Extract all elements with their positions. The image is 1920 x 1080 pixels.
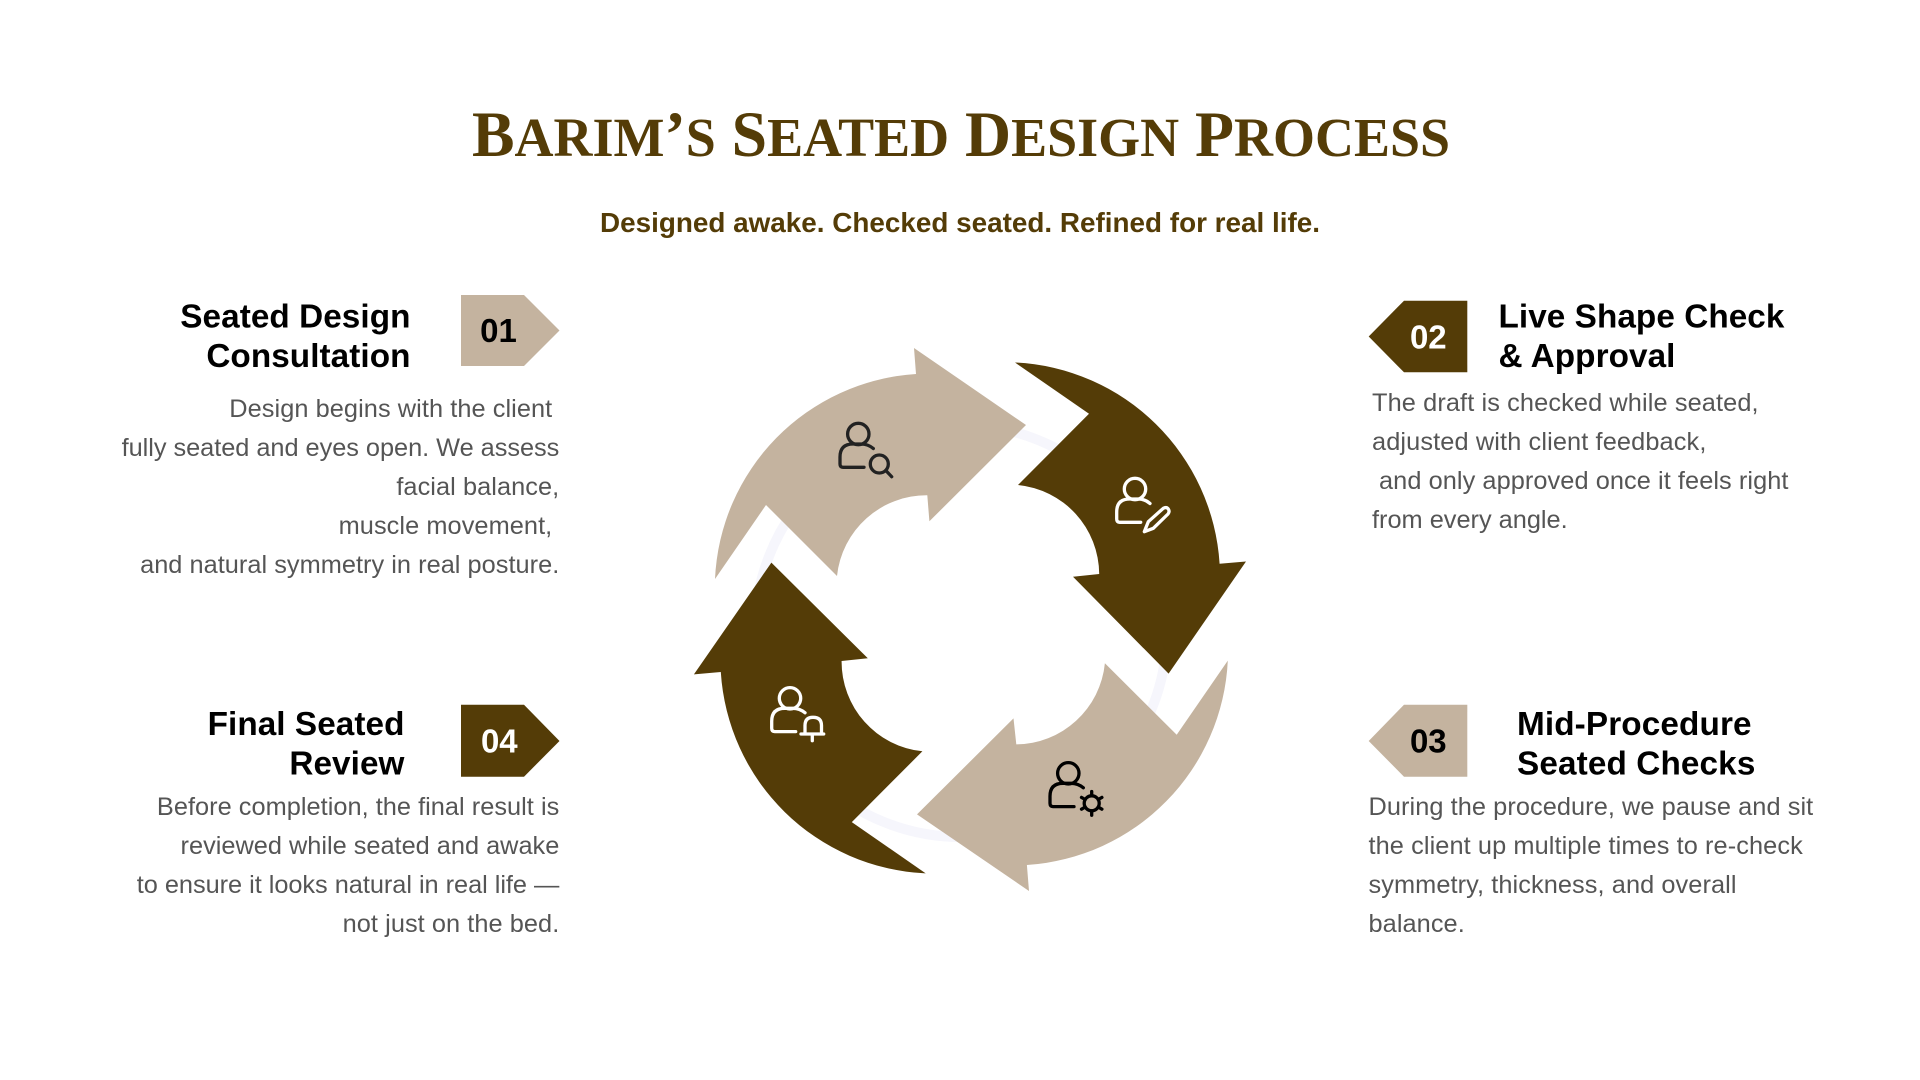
step 3 panel xyxy=(1368,705,1813,938)
description 04: not just on the bed. xyxy=(343,910,559,938)
badge 02 xyxy=(1369,301,1467,372)
description 01: and natural symmetry in real posture. xyxy=(140,551,559,579)
title: BARIM’S SEATED DESIGN PROCESS xyxy=(472,99,1450,171)
description 02: from every angle. xyxy=(1372,506,1568,534)
step 4 panel xyxy=(137,705,560,938)
icon: person with pencil xyxy=(1117,478,1169,532)
heading 04: Review xyxy=(289,746,405,782)
description 03: the client up multiple times to re-check xyxy=(1368,832,1803,860)
heading 02: & Approval xyxy=(1498,338,1675,375)
description 01 xyxy=(122,395,559,579)
arrow 2 xyxy=(1015,362,1246,674)
arrow 3 xyxy=(917,661,1228,891)
icon: person with magnifier xyxy=(840,423,892,477)
icon: person with gear xyxy=(1050,763,1102,815)
heading 04: Final Seated xyxy=(208,706,404,743)
description 04 xyxy=(137,793,560,938)
step 1 panel xyxy=(122,295,560,579)
badge 04 xyxy=(461,705,560,777)
arrow 4 xyxy=(694,563,926,873)
heading 01: Consultation xyxy=(206,338,410,375)
description 02 xyxy=(1372,389,1789,534)
description 02: The draft is checked while seated, xyxy=(1372,389,1759,417)
badge 04: 04 xyxy=(481,723,518,760)
heading 02: Live Shape Check xyxy=(1498,298,1785,336)
description 01: muscle movement, xyxy=(339,512,552,540)
description 01: facial balance, xyxy=(396,473,559,501)
heading 03: Mid-Procedure xyxy=(1517,706,1752,743)
description 03: balance. xyxy=(1368,910,1465,938)
badge 02: 02 xyxy=(1410,318,1447,355)
badge 03 xyxy=(1369,705,1467,777)
description 03 xyxy=(1368,793,1813,938)
description 01: Design begins with the client xyxy=(229,395,552,423)
description 03: symmetry, thickness, and overall xyxy=(1368,871,1737,899)
badge 03: 03 xyxy=(1410,723,1447,760)
heading 01: Seated Design xyxy=(180,298,410,336)
arrow 1 xyxy=(715,348,1026,579)
step 2 panel xyxy=(1369,298,1789,534)
description 04: to ensure it looks natural in real life — xyxy=(137,871,560,899)
description 01: fully seated and eyes open. We assess xyxy=(122,434,559,462)
cycle diagram xyxy=(694,348,1246,891)
description 02: adjusted with client feedback, xyxy=(1372,428,1706,456)
description 04: Before completion, the final result is xyxy=(157,793,559,821)
heading 03: Seated Checks xyxy=(1517,746,1755,782)
description 03: During the procedure, we pause and sit xyxy=(1368,793,1813,821)
subtitle: Designed awake. Checked seated. Refined for real life. xyxy=(600,207,1320,238)
description 02: and only approved once it feels right xyxy=(1379,467,1789,495)
icon: person with bell xyxy=(772,688,824,741)
description 04: reviewed while seated and awake xyxy=(181,832,559,860)
badge 01 xyxy=(461,295,560,366)
badge 01: 01 xyxy=(480,312,517,349)
